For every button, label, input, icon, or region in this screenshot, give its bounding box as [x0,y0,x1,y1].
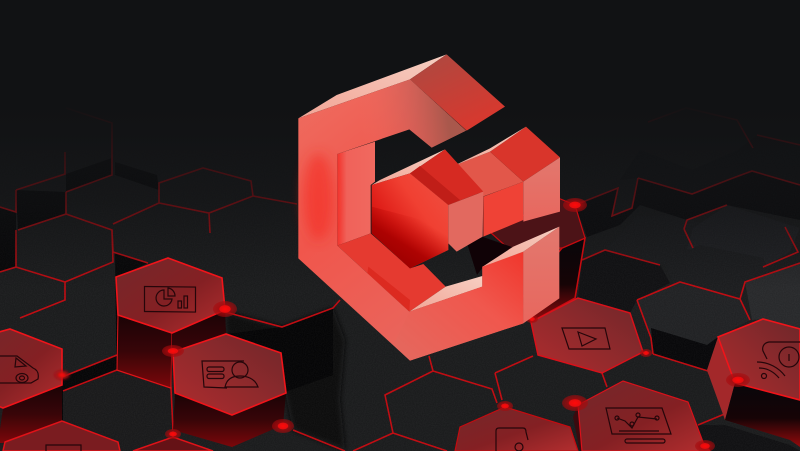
logo: inner left wall [337,142,375,246]
node [497,401,513,411]
shadow beneath logo [225,308,345,450]
hexagon: gear icon [455,407,578,451]
logo: lower front [393,252,523,361]
logo: center hexagon crease [410,166,460,205]
hexagon behind logo [467,198,585,322]
logo: rear block top left [453,152,523,197]
logo: center hexagon front [372,173,448,268]
hexagon: delivery van [0,329,62,443]
logo: center hexagon top light [372,149,445,185]
logo: main front face [298,79,523,361]
node [562,395,588,411]
hexagon: play video [531,298,643,373]
logo: lower right light [483,227,559,267]
logo: rear block front [483,182,523,237]
logo: rear block side [523,157,560,222]
node [526,315,538,323]
node [165,429,181,439]
node [563,198,587,212]
black hexagon walls, right [651,328,718,370]
icon: idea gear [496,428,528,451]
node [695,440,715,451]
dark hexagon tops, right [605,215,727,265]
hexagon: info signal [707,319,800,447]
black hexagon walls, left [0,158,159,421]
logo: center hexagon shadow [372,207,448,268]
logo: left side red glow [303,153,333,240]
logo: top light face [298,54,447,118]
logo: inner bottom face [337,233,446,312]
hexagon: bar and pie chart [116,258,226,388]
icon: chart panel [144,287,196,312]
hexagon: bottom center left [133,437,213,451]
node [54,370,70,380]
red logo [298,54,560,361]
logo: upper end cap [410,54,505,131]
hexagon: line chart [573,381,710,451]
black wall beneath logo [226,308,333,392]
logo: center hexagon top [410,149,483,205]
icon: van [0,356,38,383]
logo: rear block top right [490,127,560,182]
shaded floor, lower left [63,371,173,451]
node [162,345,184,357]
hexagon outlines, red [0,108,800,451]
dark hexagon field [0,108,800,451]
node [272,419,294,433]
node [726,373,750,387]
icon: play button [562,328,610,349]
logo: inner bottom shade [367,267,410,312]
logo: center hexagon side [448,192,483,252]
logo: rear block highlight [453,127,526,166]
hexagon: bottom left [3,421,120,451]
logo: lower right side [523,227,559,323]
icon: information waves [757,342,800,378]
icon: profile card [202,361,258,388]
glow nodes [54,198,750,451]
logo: upper arm shading [360,79,466,148]
icon: line chart monitor [606,408,671,443]
logo: lower light ledge [409,276,482,312]
icon: document [46,445,81,451]
hexagon: person profile [173,334,286,447]
node [640,349,652,357]
floor grain [0,150,800,451]
node [213,301,237,317]
